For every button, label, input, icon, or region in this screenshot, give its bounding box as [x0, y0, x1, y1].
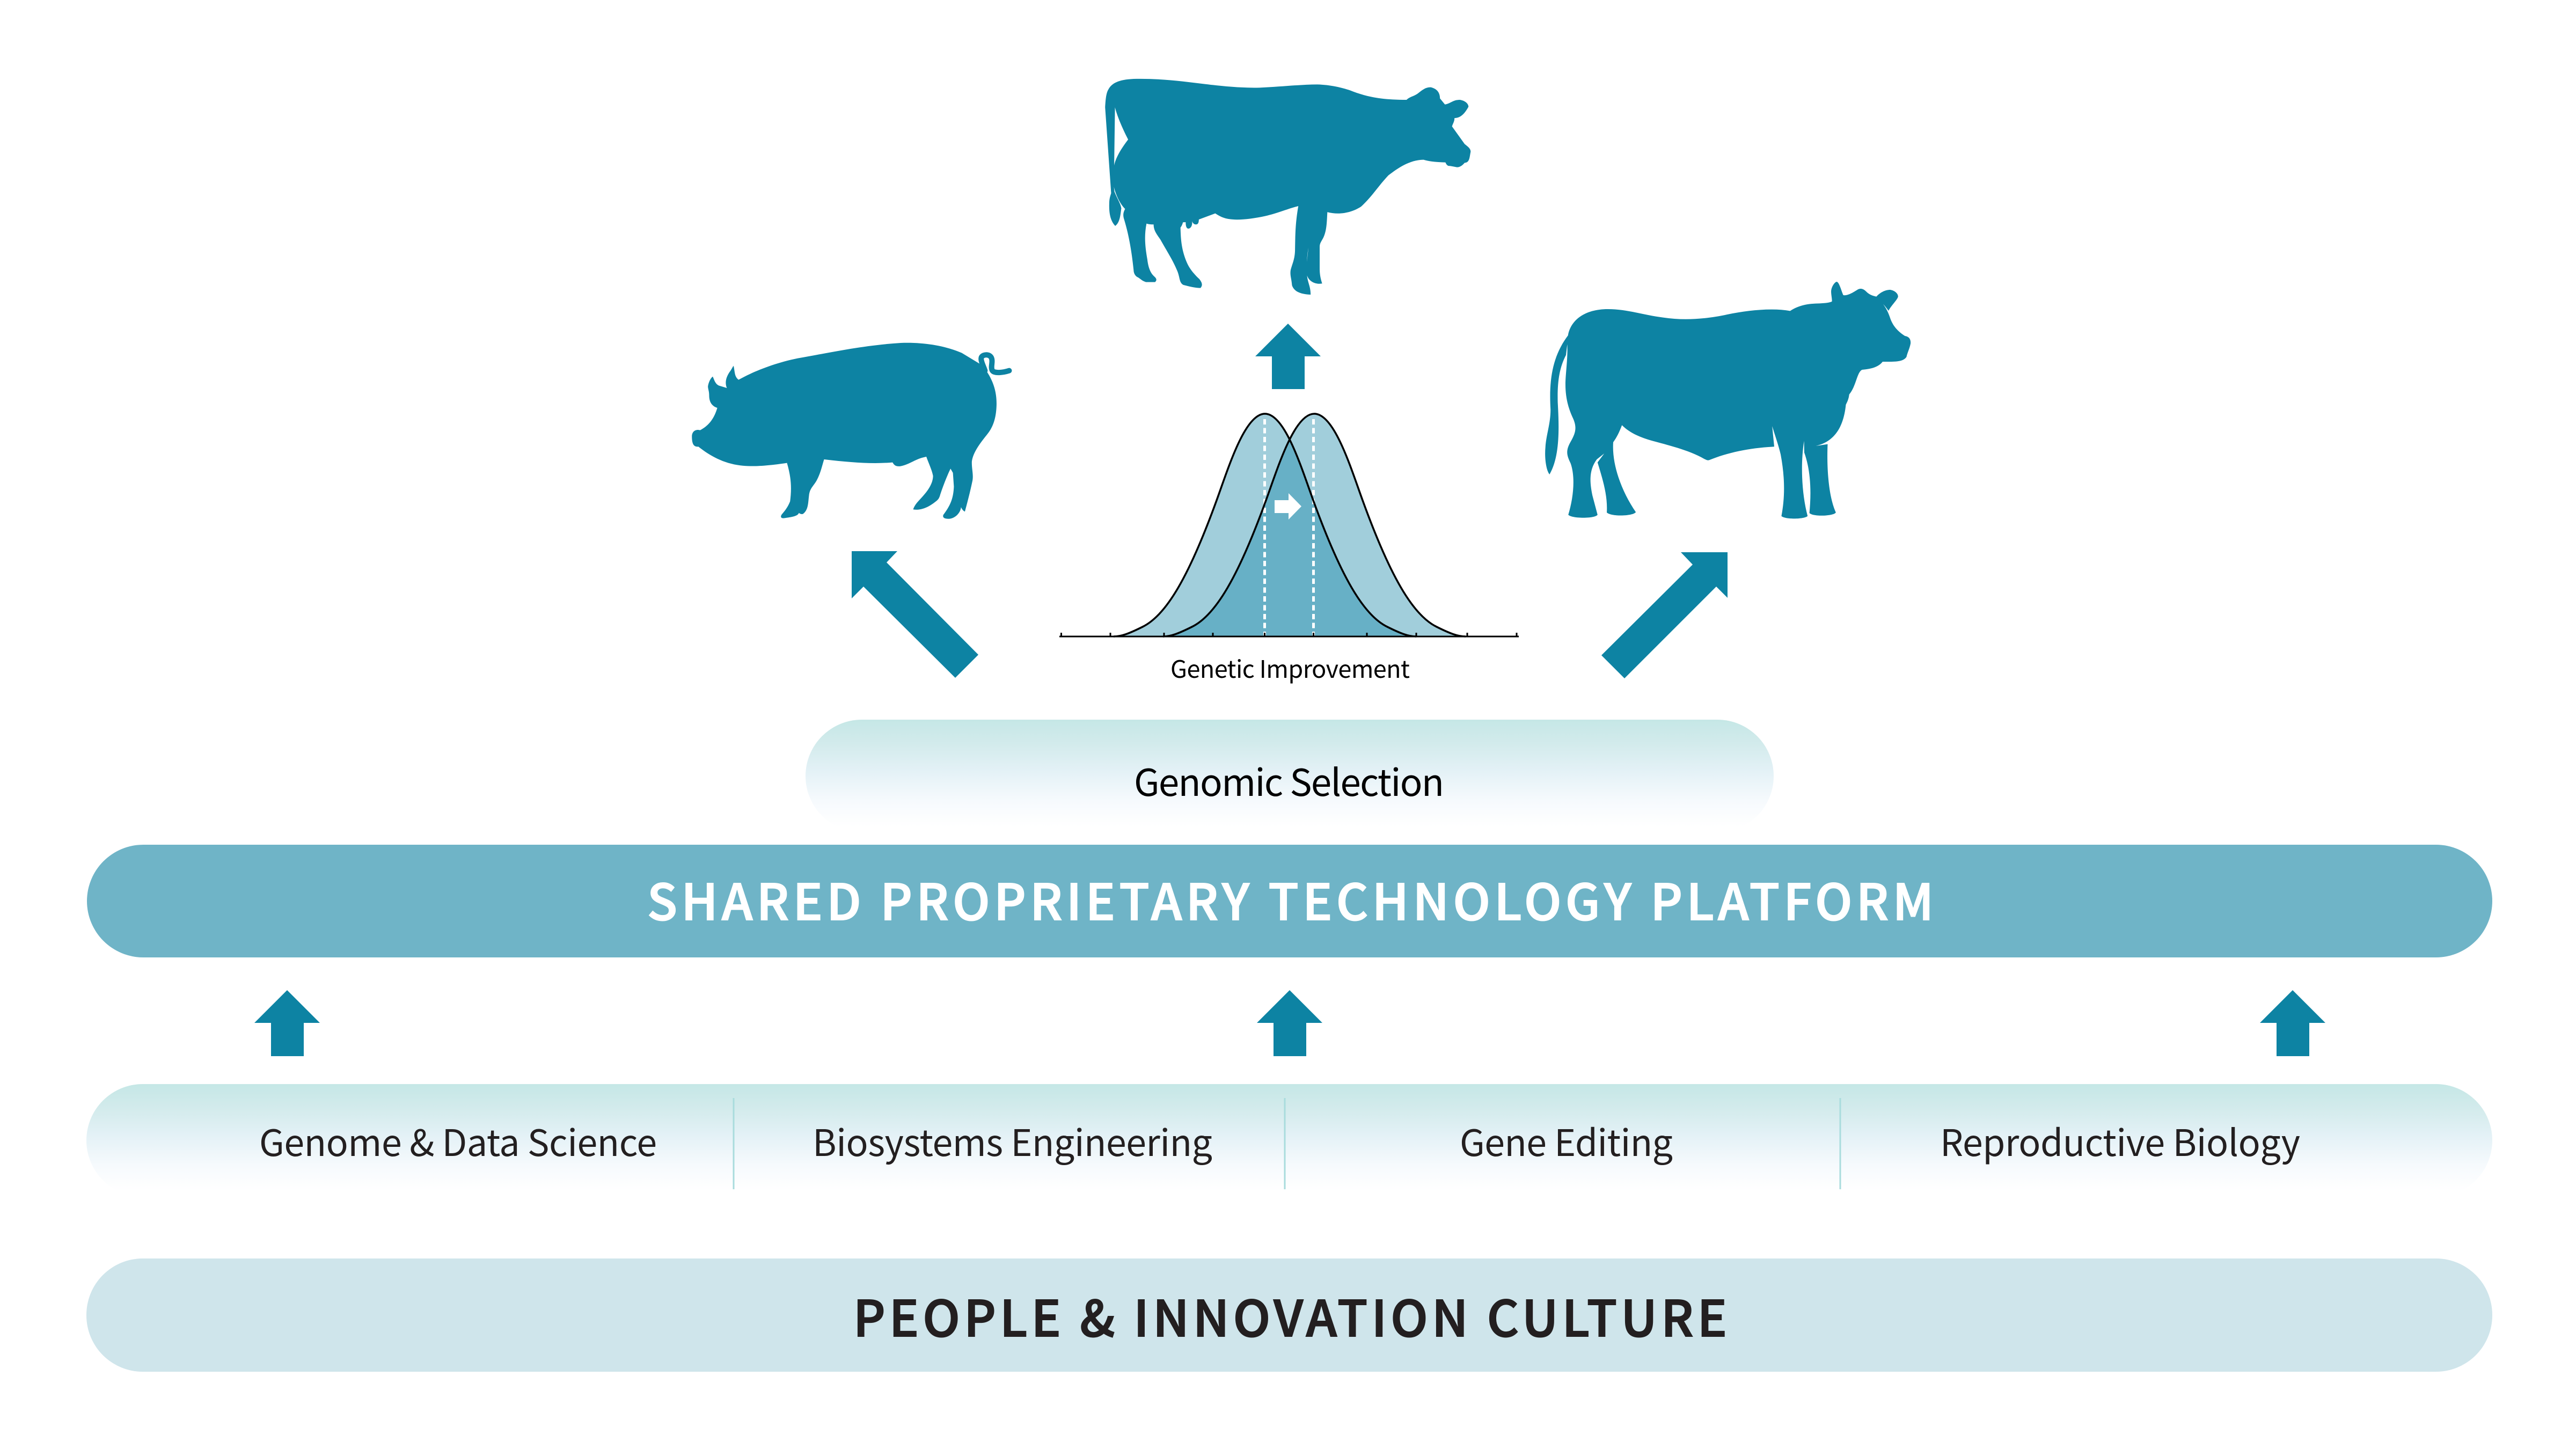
arrow: up centre [1257, 990, 1322, 1056]
icon: pig [692, 343, 1009, 519]
icon: beef cattle [1545, 282, 1911, 518]
panel: genomic selection: Genomic Selection [1134, 753, 1444, 807]
panel: enabling disciplines [86, 1084, 2492, 1197]
chart label: Genetic Improvement [1170, 650, 1410, 685]
panel: people and innovation culture: PEOPLE & INNOVATION CULTURE [853, 1279, 1727, 1351]
panel: enabling disciplines: Gene Editing [1460, 1114, 1673, 1167]
panel: enabling disciplines: Biosystems Engineering [813, 1114, 1212, 1167]
panel: genomic selection [806, 720, 1774, 832]
panel: enabling disciplines: Genome & Data Science [259, 1114, 657, 1167]
panel: shared proprietary technology platform: SHARED PROPRIETARY TECHNOLOGY PLATFORM [647, 863, 1934, 934]
panel: people and innovation culture [86, 1258, 2492, 1372]
arrow: diagonal to cattle [1601, 552, 1728, 678]
icon: dairy cow [1105, 79, 1470, 295]
arrow: up right [2260, 990, 2325, 1056]
chart: genetic improvement distributions [1059, 414, 1519, 636]
panel: enabling disciplines: Reproductive Biology [1940, 1114, 2300, 1167]
arrow: diagonal to pig [852, 551, 978, 678]
arrow: up to dairy cow [1255, 324, 1321, 389]
panel: shared proprietary technology platform [87, 845, 2492, 957]
arrow: up left [254, 990, 320, 1056]
